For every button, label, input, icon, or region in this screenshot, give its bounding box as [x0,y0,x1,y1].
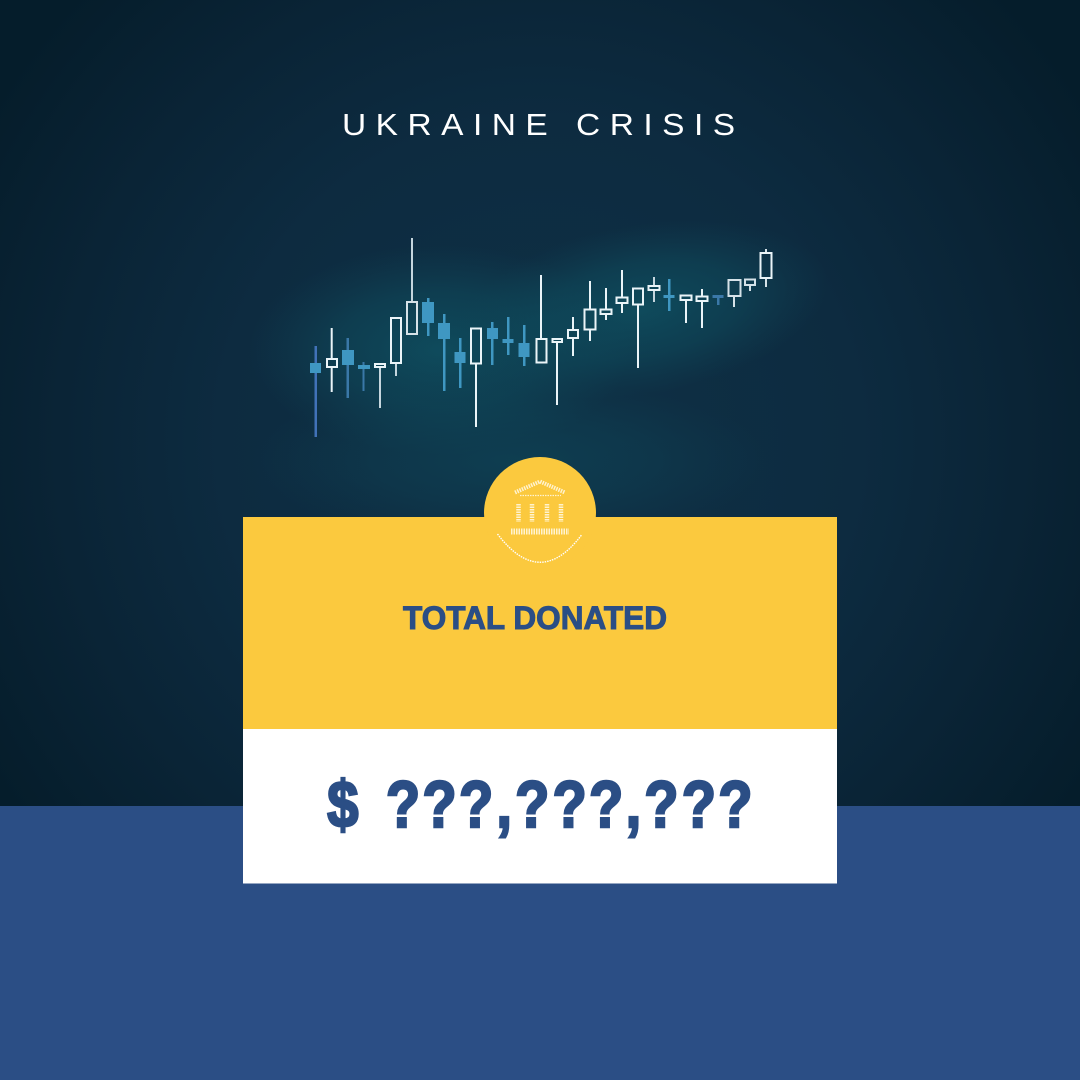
icon badge circle [484,457,596,569]
white amount panel [243,729,837,884]
blue floor band [0,806,1080,1080]
filled blue candles [310,279,724,437]
candlestick chart [310,238,772,437]
title: UKRAINE CRISIS [342,107,735,142]
donated amount: $???,???,??? [327,768,753,841]
chart glow [250,193,842,540]
yellow card panel [243,517,837,729]
icon: bank building [498,482,582,562]
total donated label: TOTAL DONATED [403,600,667,636]
hollow white candles [327,238,772,427]
dark background [0,0,1080,806]
